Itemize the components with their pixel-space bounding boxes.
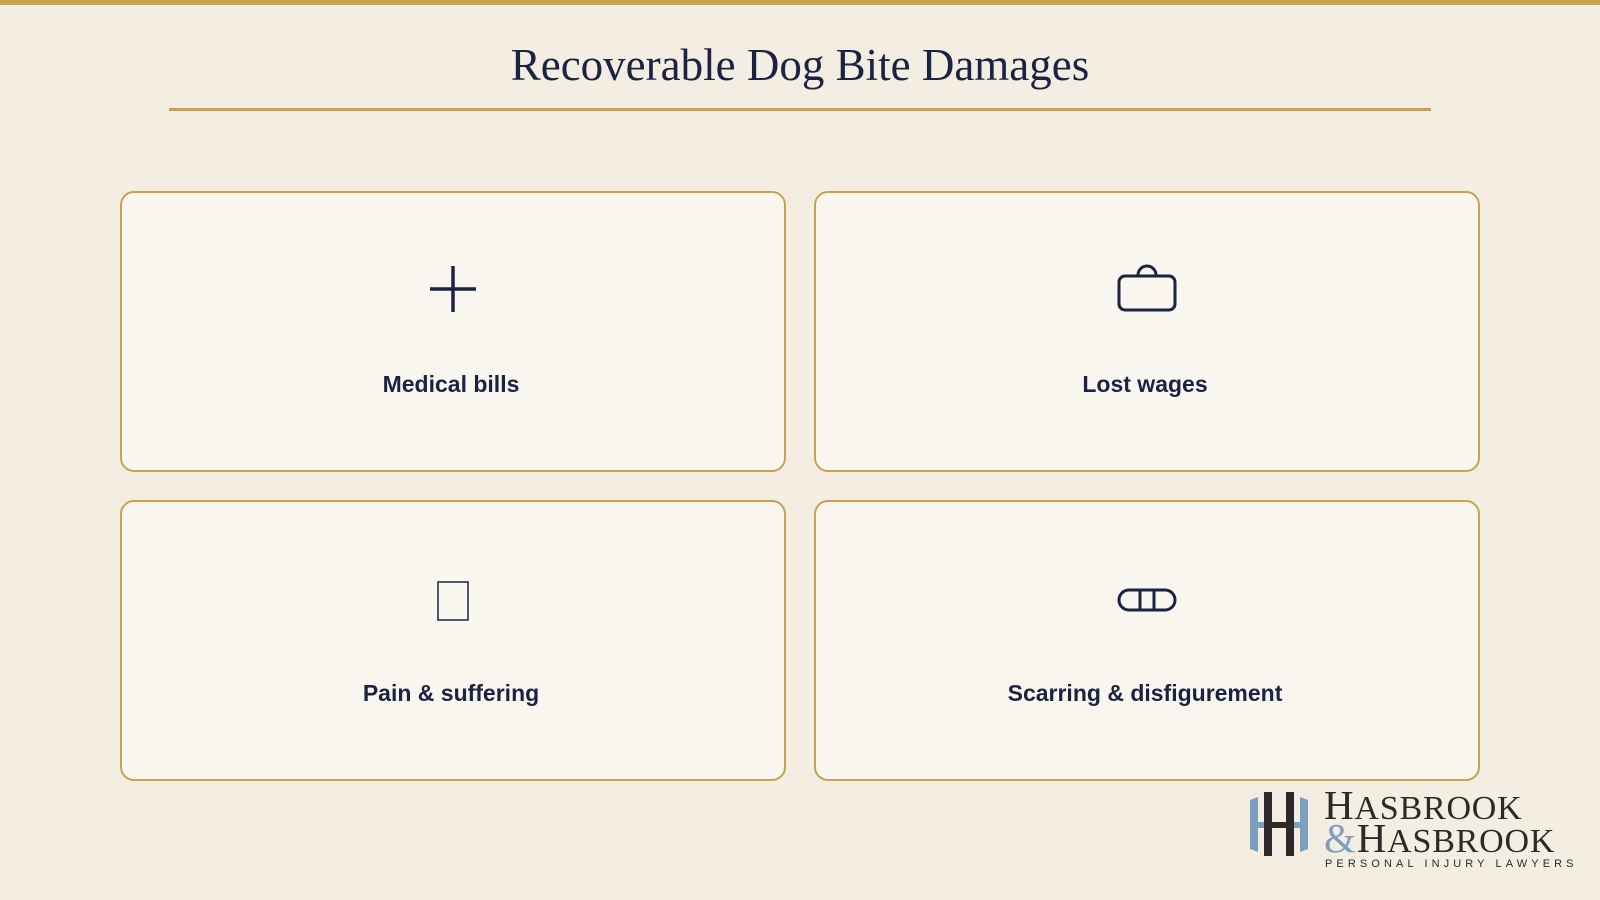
label: Pain & suffering [363, 680, 539, 706]
label: Scarring & disfigurement [1008, 680, 1282, 706]
logo: &HASBROOK [1324, 815, 1555, 861]
icon: logo mark [1250, 792, 1308, 856]
logo: PERSONAL INJURY LAWYERS [1325, 858, 1578, 870]
panel: pain & suffering [120, 500, 786, 781]
label: Lost wages [1082, 371, 1208, 397]
logo [1250, 782, 1578, 870]
title: Recoverable Dog Bite Damages [511, 40, 1089, 90]
icon: plus [430, 266, 476, 312]
panel: lost wages [814, 191, 1480, 472]
label: Medical bills [383, 371, 519, 397]
icon: box [437, 581, 469, 621]
logo: HASBROOK [1324, 782, 1523, 828]
panel: scarring [814, 500, 1480, 781]
icon: briefcase [1118, 264, 1176, 312]
icon: bandage [1118, 588, 1176, 612]
panel: medical bills [120, 191, 786, 472]
